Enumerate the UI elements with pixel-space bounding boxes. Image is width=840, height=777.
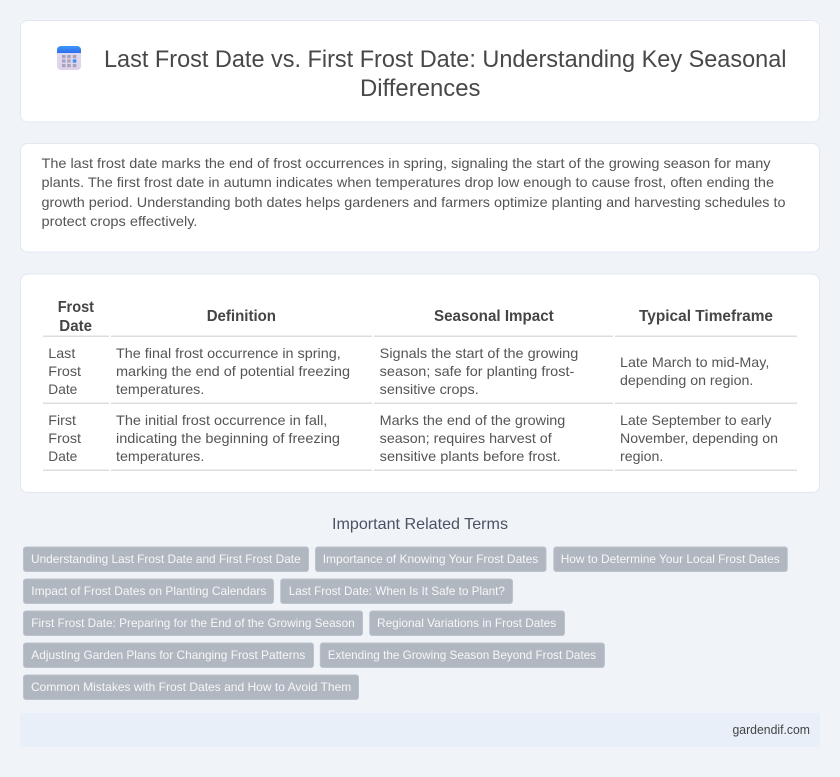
- tag: last frost date: [281, 579, 512, 604]
- title: [104, 46, 786, 102]
- title: Last Frost Date vs. First Frost Date: Understanding Key Seasonal: [104, 46, 786, 73]
- table row: last frost date: Frost: [48, 363, 81, 379]
- table header row: Frost: [58, 299, 94, 316]
- text block: summary: plants. The first frost date in autumn indicates when temperatures drop low enough to cause frost, often ending the: [42, 174, 774, 190]
- tag: common mistakes: Common Mistakes with Frost Dates and How to Avoid Them: [31, 680, 351, 694]
- table row: first frost date: sensitive plants before frost.: [380, 448, 561, 464]
- table row: first frost date: [43, 412, 797, 471]
- panel: comparison table: [20, 274, 820, 492]
- table header row: Definition: [207, 308, 276, 325]
- tag: adjusting: Adjusting Garden Plans for Changing Frost Patterns: [31, 648, 305, 662]
- tag: understanding: Understanding Last Frost Date and First Frost Date: [31, 552, 301, 566]
- table row: last frost date: temperatures.: [116, 381, 204, 397]
- tag: first frost date: First Frost Date: Preparing for the End of the Growing Season: [31, 616, 355, 630]
- table row: last frost date: The final frost occurrence in spring,: [116, 345, 341, 361]
- tag: common mistakes: [24, 675, 358, 700]
- table header row: Typical Timeframe: [639, 308, 773, 325]
- table row: first frost date: Marks the end of the growing: [380, 412, 565, 428]
- table header row: Date: [59, 318, 92, 335]
- table row: last frost date: Date: [48, 381, 78, 397]
- text block: summary: protect crops effectively.: [42, 213, 198, 229]
- icon: calendar: [57, 46, 81, 70]
- text block: summary: [42, 155, 786, 229]
- tag: regional variations: [370, 611, 564, 636]
- title: Differences: [360, 75, 480, 102]
- table row: first frost date: temperatures.: [116, 448, 204, 464]
- tag: last frost date: Last Frost Date: When Is It Safe to Plant?: [289, 584, 505, 598]
- table row: last frost date: Signals the start of the growing: [380, 345, 578, 361]
- table row: last frost date: depending on region.: [620, 372, 753, 388]
- header panel: [20, 20, 820, 122]
- table row: first frost date: Date: [48, 448, 78, 464]
- text block: summary: The last frost date marks the end of frost occurrences in spring, signaling the start of the growing season for many: [42, 155, 770, 171]
- tag: first frost date: [24, 611, 362, 636]
- table row: last frost date: marking the end of potential freezing: [116, 363, 350, 379]
- table row: last frost date: Late March to mid-May,: [620, 354, 769, 370]
- tag: regional variations: Regional Variations in Frost Dates: [377, 616, 556, 630]
- footer: gardendif.com: [732, 723, 810, 737]
- tag: understanding: [24, 547, 308, 572]
- footer: [20, 713, 820, 747]
- tag: how to determine: [554, 547, 787, 572]
- panel: summary paragraph: [20, 144, 820, 252]
- table row: first frost date: The initial frost occurrence in fall,: [116, 412, 327, 428]
- table row: first frost date: November, depending on: [620, 430, 778, 446]
- table row: first frost date: Late September to early: [620, 412, 771, 428]
- table header row: [43, 299, 797, 337]
- tag: extending: [320, 643, 604, 668]
- tag: importance: [316, 547, 546, 572]
- table header row: Seasonal Impact: [434, 308, 554, 325]
- table row: first frost date: season; requires harvest of: [380, 430, 552, 446]
- tag: adjusting: [24, 643, 314, 668]
- table row: first frost date: First: [48, 412, 76, 428]
- tag: impact: Impact of Frost Dates on Planting Calendars: [31, 584, 266, 598]
- table row: first frost date: Frost: [48, 430, 81, 446]
- table row: first frost date: indicating the beginning of freezing: [116, 430, 340, 446]
- heading: important related terms: Important Related Terms: [332, 516, 508, 533]
- tag: extending: Extending the Growing Season Beyond Frost Dates: [328, 648, 596, 662]
- table row: last frost date: season; safe for planting frost-: [380, 363, 575, 379]
- table row: first frost date: region.: [620, 448, 663, 464]
- table row: last frost date: [43, 345, 797, 404]
- tag: importance: Importance of Knowing Your Frost Dates: [323, 552, 538, 566]
- tag: impact: [24, 579, 274, 604]
- table row: last frost date: Last: [48, 345, 75, 361]
- text block: summary: growth period. Understanding both dates helps gardeners and farmers optimize planting and harvesting schedules to: [42, 194, 786, 210]
- panel: related term tags: [24, 547, 787, 700]
- tag: how to determine: How to Determine Your Local Frost Dates: [561, 552, 780, 566]
- table row: last frost date: sensitive crops.: [380, 381, 479, 397]
